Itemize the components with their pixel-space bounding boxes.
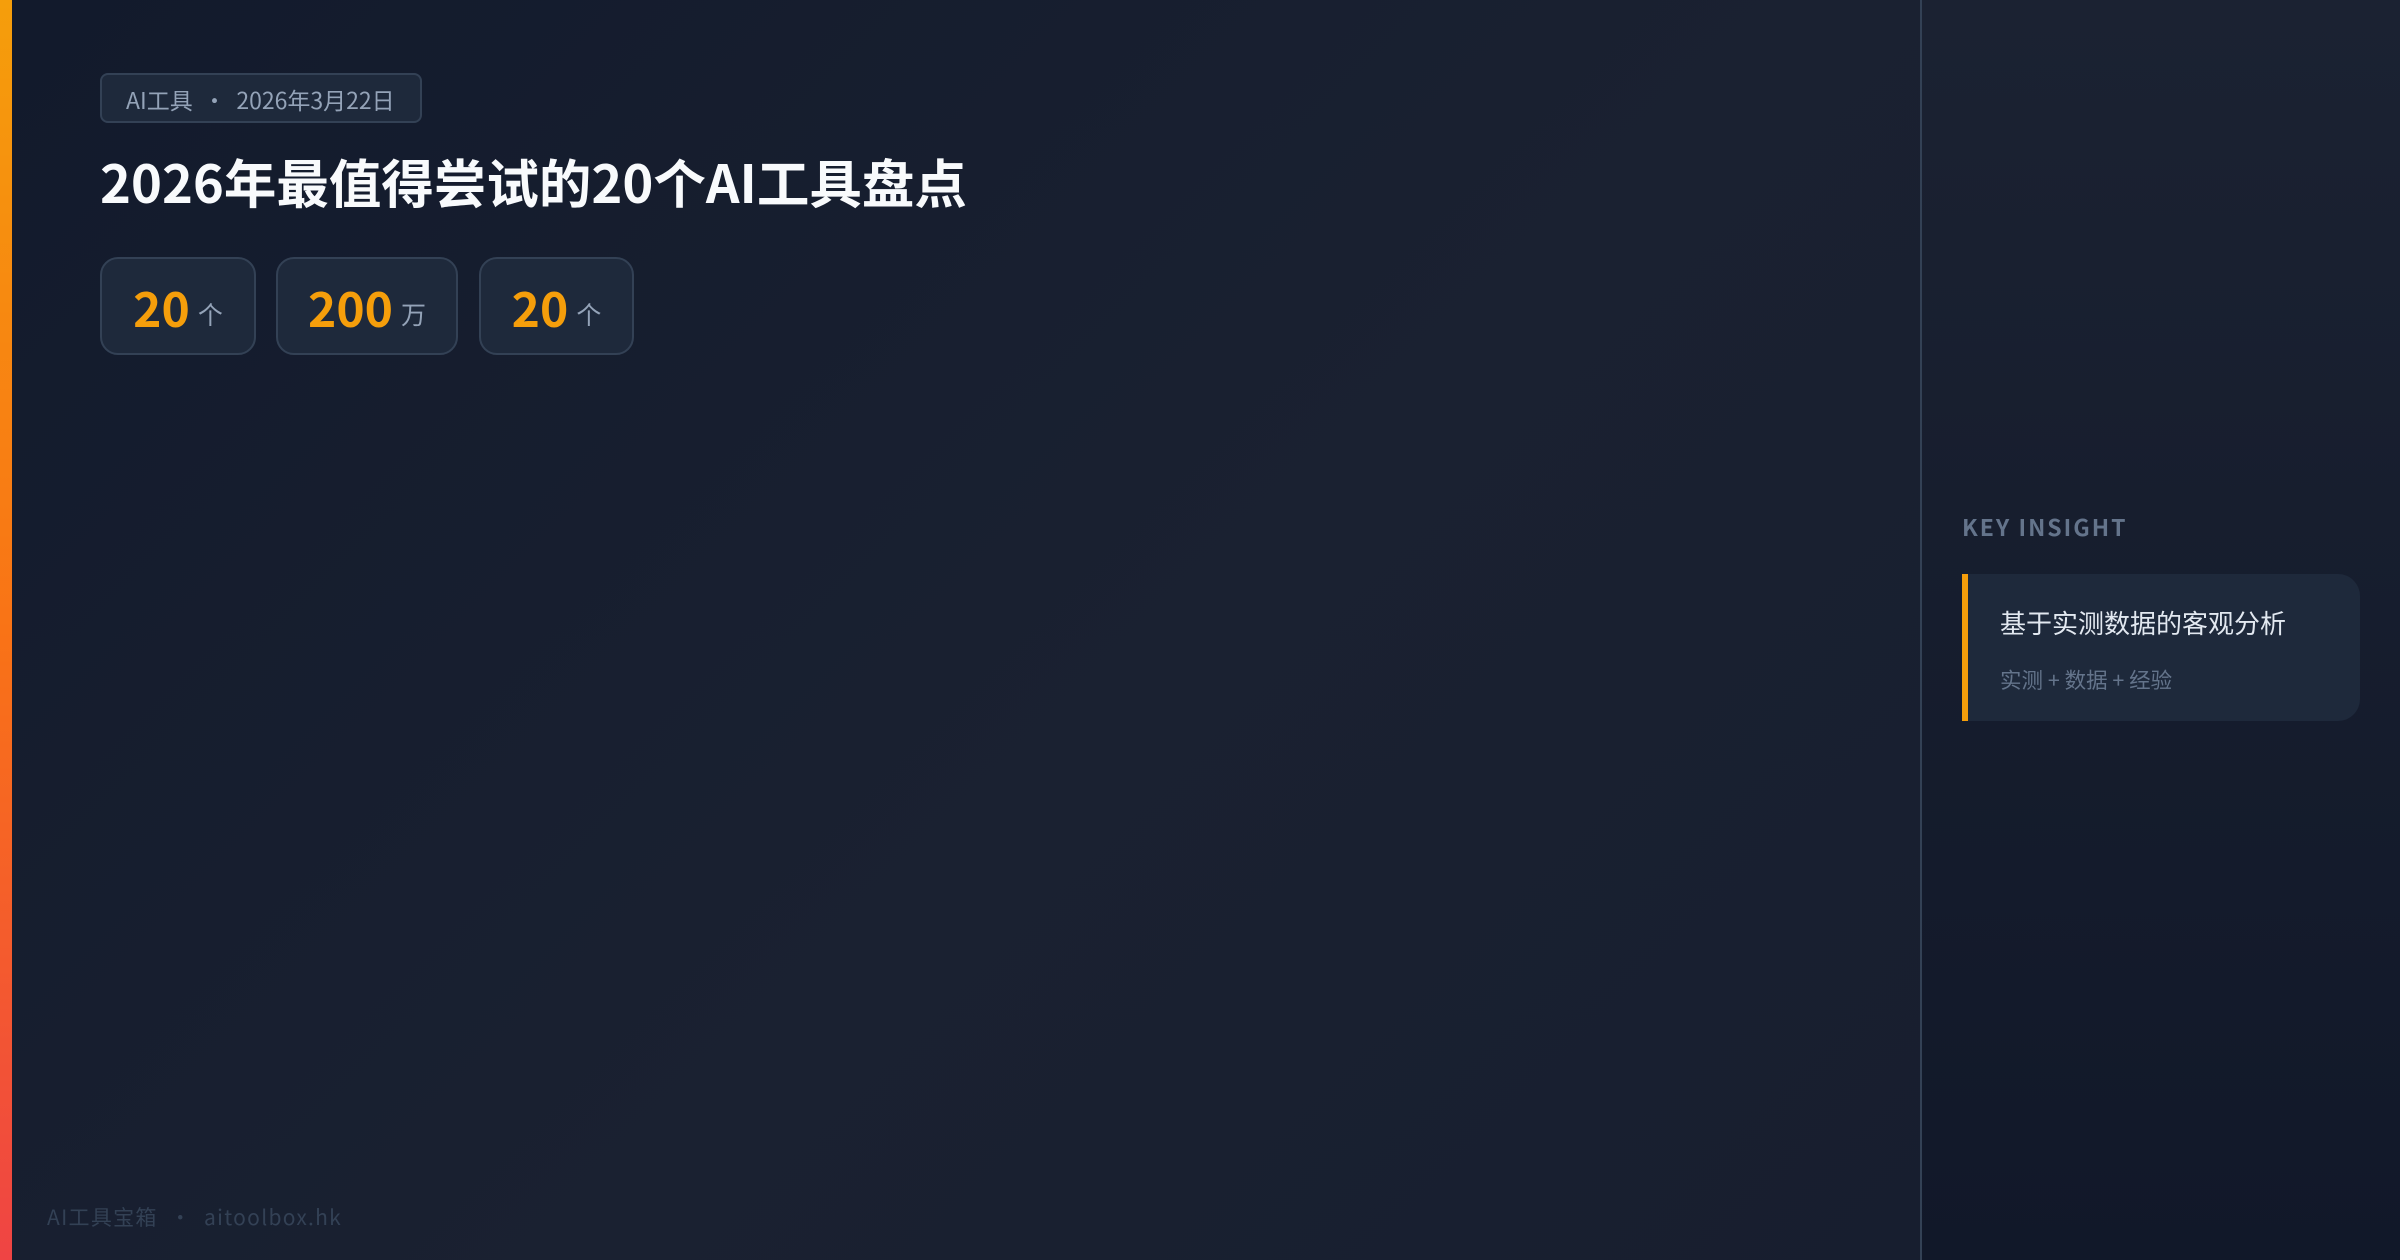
accent bar: [0, 0, 12, 1260]
insight text: 基于实测数据的客观分析: [2000, 604, 2286, 641]
stat: 20 个: [100, 257, 256, 355]
insight card: [1962, 574, 2360, 721]
stat: 20 个: 个: [198, 296, 223, 332]
right panel: [1920, 0, 2400, 1260]
insight subtext: 实测 + 数据 + 经验: [2000, 664, 2172, 695]
stat: 20 个: [479, 257, 634, 355]
key insight heading: KEY INSIGHT: [1962, 509, 2128, 543]
title: 2026年最值得尝试的20个AI工具盘点: [100, 143, 967, 219]
stat: 200 万: 万: [401, 296, 426, 332]
tag: category and date: [100, 73, 422, 123]
stat: 20 个: 20: [512, 271, 568, 341]
tag: category and date: AI工具 · 2026年3月22日: [126, 82, 395, 116]
stat: 20 个: 20: [133, 271, 190, 341]
footer: AI工具宝箱 · aitoolbox.hk: [47, 1202, 342, 1232]
stat: 200 万: 200: [308, 271, 393, 341]
stat: 200 万: [276, 257, 458, 355]
stat: 20 个: 个: [576, 296, 601, 332]
